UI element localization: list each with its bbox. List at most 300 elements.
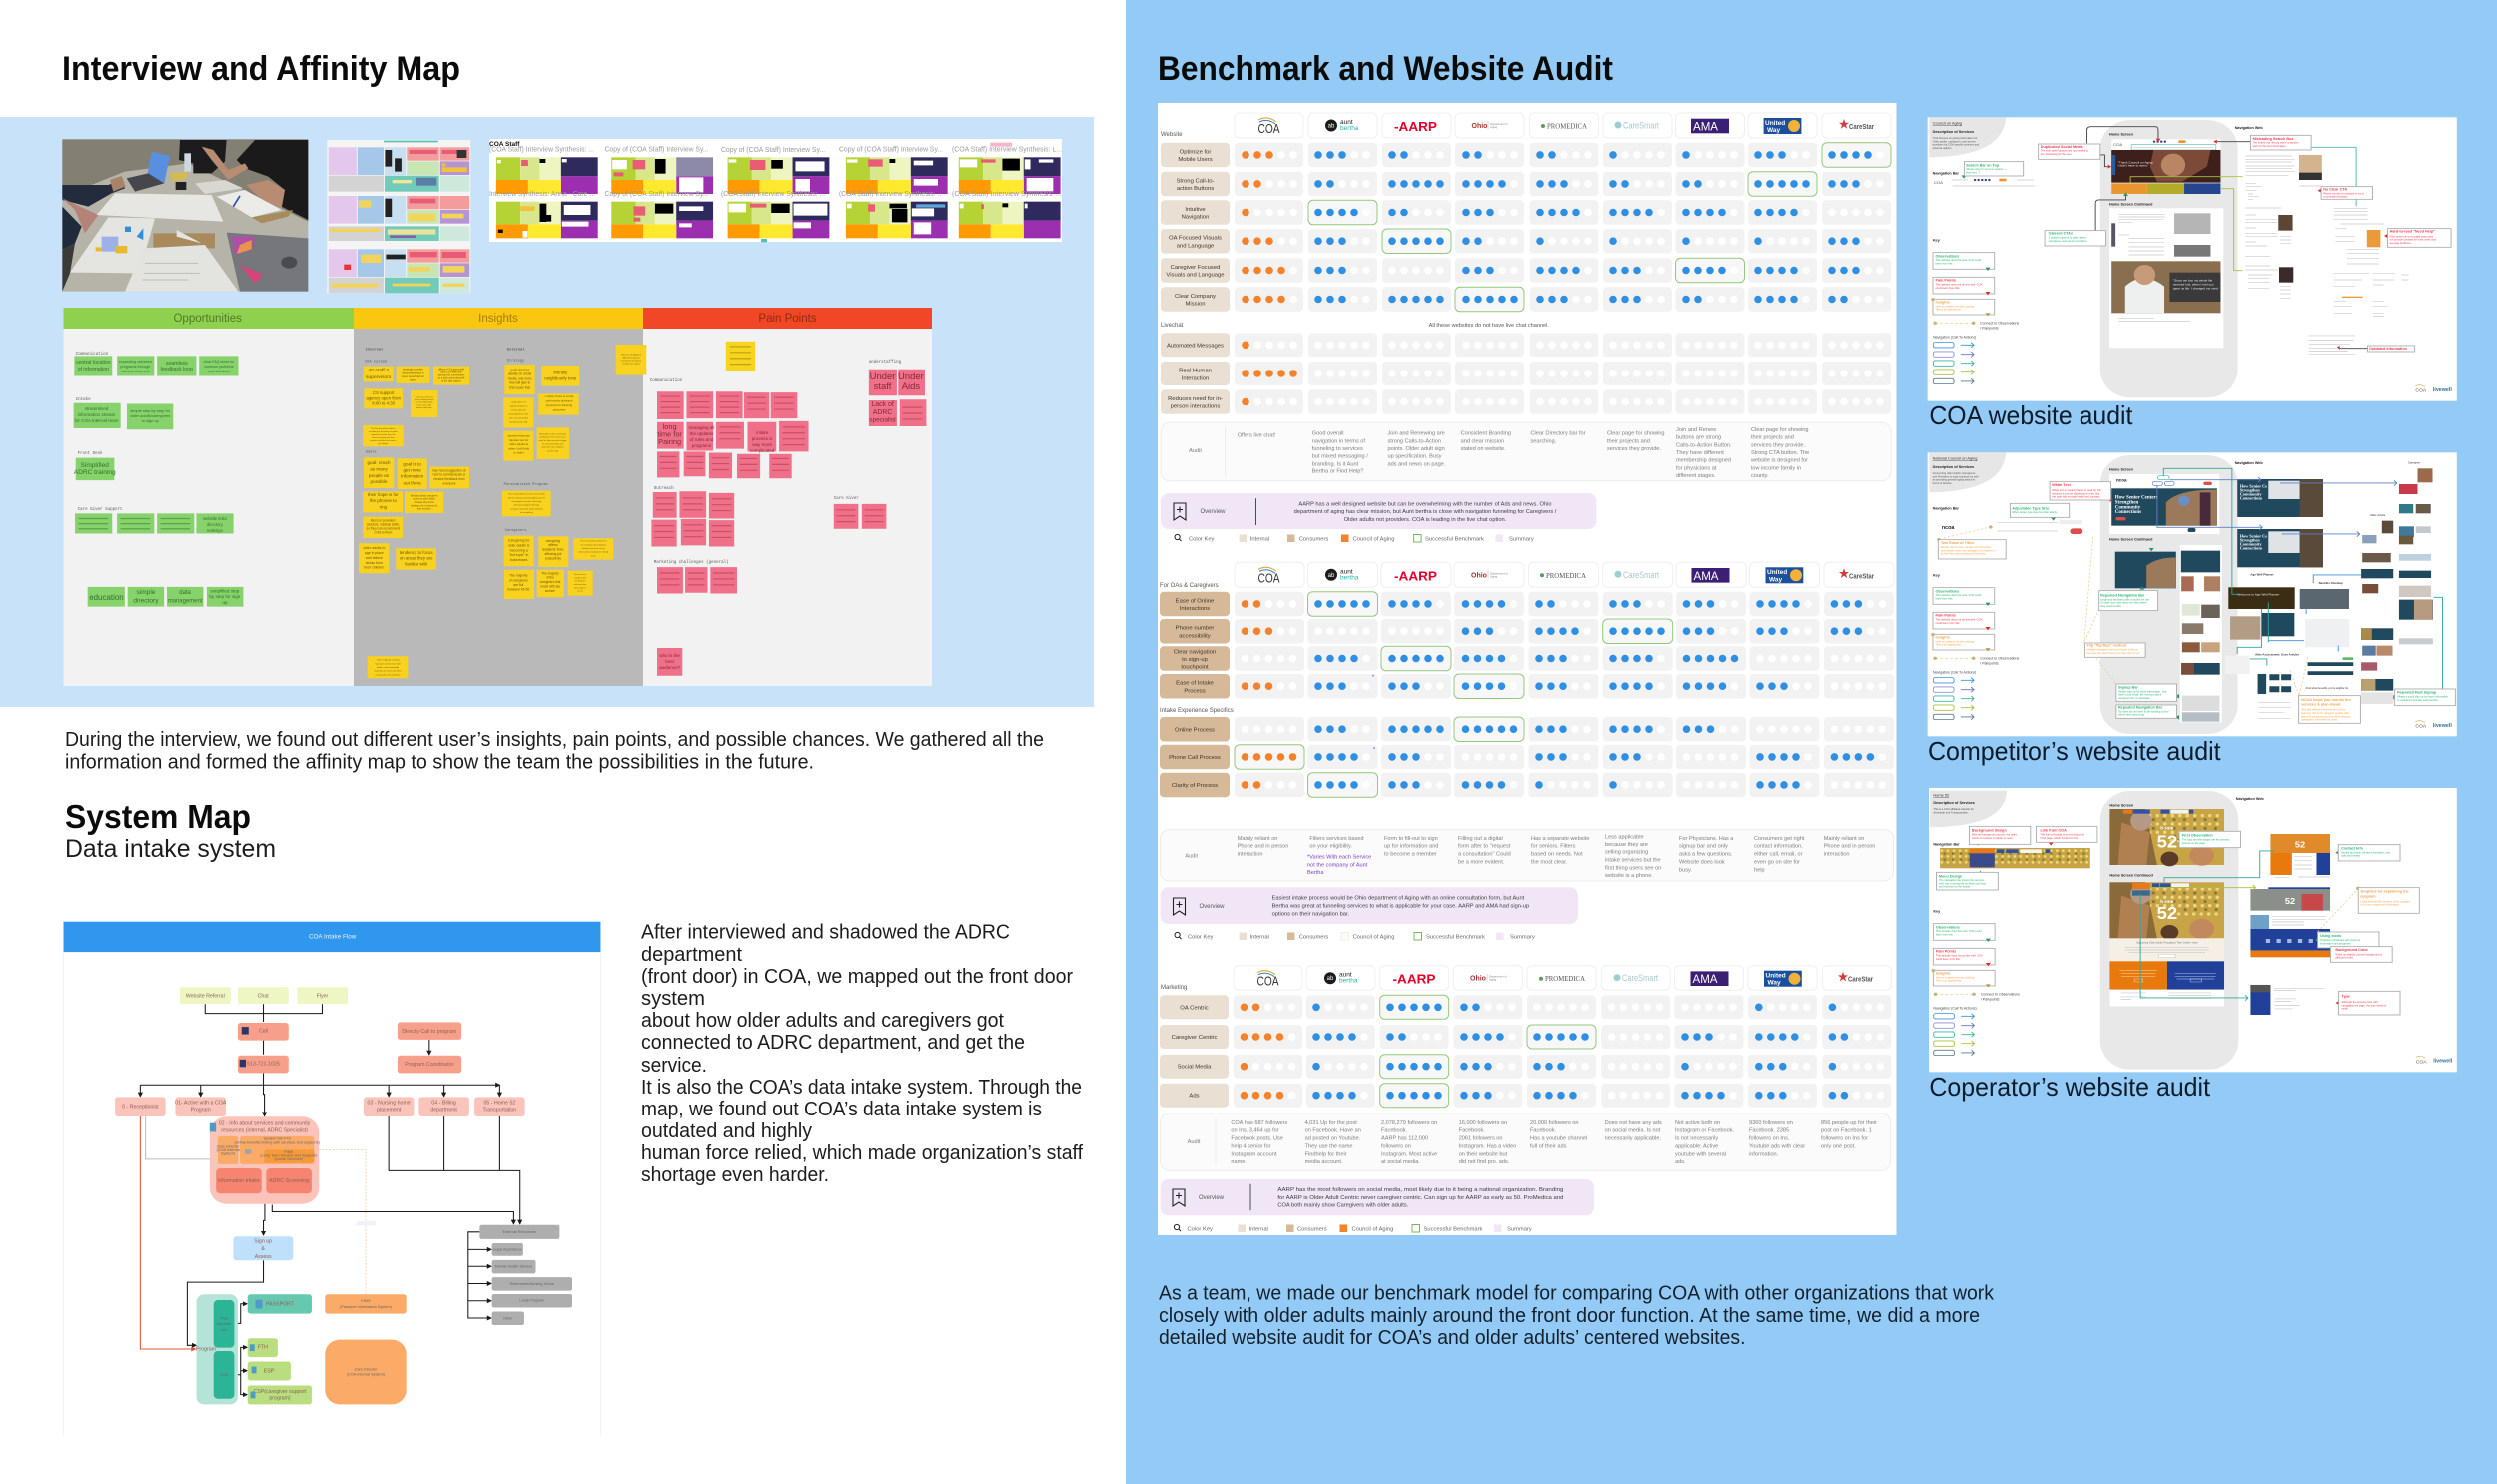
yellow sticky text: agency open from xyxy=(366,395,401,400)
yellow sticky text: advanced consultation in doing xyxy=(578,551,609,554)
yellow sticky text: required, the more and other xyxy=(374,670,402,673)
label: Intake Experience Specifics: Intake Experience Specifics xyxy=(1160,708,1234,714)
programs: COA xyxy=(220,1373,229,1377)
green sticky text: by step for sign xyxy=(209,594,241,599)
information systems: PIMS xyxy=(361,1299,371,1303)
audit notes: intake: signup bar and only xyxy=(1679,844,1728,850)
home screen mock: Strengthen xyxy=(2115,500,2139,505)
logo row 1: Department of xyxy=(1490,122,1508,126)
diagram: cooperator website audit xyxy=(1929,788,2457,1072)
audit notes: intake: the most clear. xyxy=(1531,859,1568,865)
audit notes: marketing: Instagram or Facebook. xyxy=(1675,1128,1735,1134)
home screen mock: "Thank Council on Aging xyxy=(2118,160,2153,164)
green sticky text: older adults/caregivers xyxy=(130,413,170,418)
key legend xyxy=(1931,239,2020,384)
logo row 2: PROMEDICA xyxy=(1546,572,1586,580)
right panel background xyxy=(1126,0,2497,1484)
yellow sticky text: The first step of the intake is xyxy=(371,427,396,430)
thumbnail captions: Copy of (COA Staff) Interview Sy... xyxy=(605,144,709,154)
callouts: With this different assessment tool for xyxy=(2301,708,2346,712)
description card xyxy=(1929,117,2006,157)
key legend: Observations xyxy=(1936,925,1960,929)
key legend: Key xyxy=(1933,239,1940,243)
rating row: Clear Company Mission: Clear Company xyxy=(1175,294,1216,300)
yellow sticky text: more xyxy=(591,554,597,557)
yellow sticky text: supervisors xyxy=(366,374,392,380)
yellow sticky text: how to communicate or xyxy=(433,473,465,477)
audit notes: website xyxy=(1161,422,1891,481)
callouts: Nice feel...? xyxy=(1966,170,1981,174)
rating row: Ease of Online Interactions xyxy=(1164,592,1890,616)
audit notes: website: Clear page for showing xyxy=(1607,430,1665,436)
yellow sticky text: because they know xyxy=(415,501,434,504)
callouts: have to put email, the rest you add a xyxy=(2118,693,2162,697)
rating row: Reduces need for in-person interactions: person interactions xyxy=(1171,404,1220,410)
sticky note category labels: Communication xyxy=(76,352,109,357)
callouts: Link from COA xyxy=(2040,828,2067,832)
pink sticky text: Lack of xyxy=(871,401,894,408)
callouts: program xyxy=(2360,894,2376,898)
audit notes: marketing: Findhelp for their xyxy=(1305,1151,1347,1157)
audit notes: marketing: on Facebook. Have an xyxy=(1305,1128,1361,1134)
ADRC specialist group: System) xyxy=(221,1152,236,1155)
yellow sticky text: provider and then the team to xyxy=(370,439,397,442)
color key: website: Color Key xyxy=(1189,537,1215,543)
rating row: Automated Messages xyxy=(1165,337,1887,353)
callouts: NCOA helps you narrow the xyxy=(2301,698,2351,702)
yellow sticky text: training to be in person for xyxy=(411,504,437,507)
navigation web pages: Strengthen xyxy=(2240,538,2261,543)
description card: Connecting older Adults, Caregivers, xyxy=(1933,471,1976,475)
key legend: learn from this. xyxy=(1935,261,1953,265)
callouts: Two Rows of Titles xyxy=(1941,541,1974,545)
audit notes: intake: busy. xyxy=(1679,867,1692,873)
pink sticky text: time for xyxy=(657,429,682,439)
logo row 3: Ohio xyxy=(1470,976,1486,983)
green sticky text: to sign up xyxy=(142,418,160,423)
yellow sticky text: out there xyxy=(403,480,421,485)
yellow sticky note shapes xyxy=(359,345,646,678)
insights sticky notes xyxy=(359,345,646,678)
audit notes: marketing: applicable. Active xyxy=(1675,1143,1718,1149)
pink sticky text: Under xyxy=(898,371,924,382)
logo row 1: aunt xyxy=(1340,119,1353,126)
yellow sticky text: Most on providers xyxy=(371,518,396,522)
navigation web pages: Benefits Checkup xyxy=(2319,581,2343,585)
yellow sticky text: and relieve xyxy=(366,556,383,560)
audit notes: website: strong Calls-to-Action xyxy=(1388,438,1441,444)
logo row 1: Ohio xyxy=(1472,123,1487,130)
callouts: Simple sign up for more information. Just xyxy=(2118,689,2167,693)
navigation web pages: Navigation Web xyxy=(2235,461,2263,465)
audit notes: website: services they provide. xyxy=(1751,442,1806,448)
logo row 1: CareSmart xyxy=(1623,120,1659,130)
yellow sticky text: age in place xyxy=(365,551,384,555)
column: Pain Points xyxy=(643,308,932,686)
audit notes: website: services they provide. xyxy=(1607,446,1662,452)
yellow sticky text: 8:00 to 4:30 xyxy=(372,401,396,406)
navigation bar sample: Navigation Bar xyxy=(1933,507,1960,511)
logo row 1: PROMEDICA xyxy=(1547,122,1587,130)
yellow sticky text: source, meeting with their xyxy=(372,436,395,439)
key legend: Insights xyxy=(1935,301,1950,305)
audit notes: marketing: help 4 senior for xyxy=(1231,1143,1271,1149)
yellow sticky text: businesses xyxy=(510,558,528,562)
pink sticky text: process is xyxy=(752,436,773,441)
yellow sticky text: "hot topic" in xyxy=(509,553,528,557)
home screen mock xyxy=(2109,467,2219,534)
callouts: a consistent location. xyxy=(2323,194,2348,198)
description card: external options. xyxy=(1933,146,1952,150)
audit arrows xyxy=(2051,468,2443,720)
panel: benchmark table xyxy=(1158,103,1896,1235)
audit notes: website: navigation in terms of xyxy=(1312,438,1365,444)
audit notes: intake: Filters services based xyxy=(1309,836,1363,842)
audit notes: marketing: followers on xyxy=(1381,1143,1411,1149)
department options: 01- Active with a COA xyxy=(175,1101,227,1106)
yellow sticky text: their hope is for xyxy=(368,492,399,497)
text block: interview summary xyxy=(65,729,1044,773)
audit notes: website: branding. Is it Aunt xyxy=(1312,462,1359,468)
audit notes: website: different stages. xyxy=(1676,473,1716,479)
logo row 1: -AARP xyxy=(1394,119,1437,134)
column: Insights xyxy=(354,308,643,686)
color key: marketing: Council of Aging xyxy=(1352,1226,1393,1232)
home screen mock xyxy=(2109,132,2220,194)
callouts: not provide contrast for most users and xyxy=(2390,238,2436,242)
audit notes: marketing: 2,078,279 followers on xyxy=(1381,1120,1437,1126)
audit notes: website: low income family in xyxy=(1751,465,1801,471)
description card: Council on Aging xyxy=(1933,122,1962,126)
audit notes: intake: not the company of Aunt xyxy=(1307,862,1368,868)
home screen mock: How Senior Centers xyxy=(2115,495,2158,500)
text block: system map description xyxy=(641,921,1083,1186)
rating row: Ease of Online Interactions: Ease of Online xyxy=(1176,598,1215,604)
callouts: White on brightly colored background is xyxy=(2335,952,2383,956)
call boxes: Call xyxy=(259,1029,268,1034)
key legend: Observations xyxy=(1935,589,1959,593)
key legend: Pain Points xyxy=(1935,279,1956,283)
green sticky text: clear FAQ sheet for xyxy=(204,360,235,364)
pink sticky text: managing all xyxy=(689,425,714,430)
footer logos xyxy=(2416,1056,2453,1065)
pink sticky text: Aids xyxy=(902,381,920,392)
pink sticky text: best xyxy=(665,659,675,664)
caption: COA website audit: COA website audit xyxy=(1929,402,2132,430)
yellow sticky text: between 45-55 xyxy=(507,588,529,592)
sticky note category labels: Outreach xyxy=(654,486,674,491)
callouts: Although the pictures help with xyxy=(2341,1000,2378,1004)
audit notes: intake: a consultation" Could xyxy=(1458,852,1511,858)
color key: marketing: Internal xyxy=(1248,1226,1268,1232)
callouts: Duplicated Social Media xyxy=(2041,145,2084,149)
callouts: White text is usually harder to read for OA xyxy=(2052,488,2101,492)
callouts: well, has a strong tab as when you float xyxy=(1939,881,1986,885)
description card: and Providers to local solutions as well xyxy=(1933,474,1979,478)
yellow sticky text: are full xyxy=(513,583,524,587)
yellow sticky text: number for calling xyxy=(622,362,640,365)
insights category labels: Internal xyxy=(366,347,384,352)
call boxes: Directly Call to program xyxy=(402,1029,456,1035)
callouts: Graphics for explaining the xyxy=(2360,890,2409,894)
key legend: could learn from this. xyxy=(1936,957,1961,961)
description card: home of articles. xyxy=(1933,481,1952,485)
thumbnail captions: Copy of (COA Staff) Interview Sy... xyxy=(839,144,943,154)
audit notes: intake: be a more evident. xyxy=(1458,859,1505,865)
yellow sticky text: the phones to xyxy=(370,498,397,503)
description card: Older adults, caregivers, and service xyxy=(1933,139,1976,143)
green sticky text: information stream xyxy=(78,412,116,417)
overview: website: department of aging has clear mission, but Aunt bertha is close with navigation funneling for Caregivers / xyxy=(1294,509,1557,515)
logo row 2: ab xyxy=(1328,573,1335,579)
description card xyxy=(1929,452,2006,492)
key legend: This website does this well. COA could xyxy=(1936,929,1982,933)
audit notes: website: and clear mission xyxy=(1461,438,1504,444)
logo row 2: -AARP xyxy=(1394,568,1437,583)
text block: system map description: (front door) in COA, we mapped out the front door xyxy=(641,966,1073,988)
rating row: Strong Call-to-action Buttons xyxy=(1165,172,1887,196)
logo row 3: Aging xyxy=(1489,978,1497,982)
audit notes: intake: For Physicians. Has a xyxy=(1679,836,1734,842)
yellow sticky text: and knows the phone xyxy=(621,359,642,362)
audit notes: website: up specification. Busy xyxy=(1388,454,1442,460)
description card: Assistrate and Transportation. xyxy=(1933,810,1969,814)
yellow sticky text: We have struggled in xyxy=(621,353,642,356)
audit notes: intake: Bertha xyxy=(1307,870,1324,876)
yellow sticky text: so they can recommend xyxy=(366,526,400,530)
home screen mock xyxy=(2109,803,2224,866)
color key: website: Internal xyxy=(1250,537,1269,543)
audit notes: marketing: Youtube ads with clear xyxy=(1749,1143,1805,1149)
callouts: COA page, which is hard to find. xyxy=(2040,836,2079,840)
logo row 2: Department of xyxy=(1490,571,1508,575)
audit notes: website: for physicians at xyxy=(1676,465,1717,471)
chart: COA intake flow xyxy=(64,922,600,1437)
description card xyxy=(1930,791,2007,827)
programs: FTH xyxy=(258,1344,268,1350)
key legend: This website does this well. COA could xyxy=(1935,258,1982,262)
callouts: for a more organized information. xyxy=(2360,903,2400,907)
description card: providers for COA specific services and xyxy=(1933,143,1980,147)
green sticky text: management xyxy=(168,598,203,605)
callouts: Simple way for users to explore — xyxy=(1966,167,2007,171)
logo row 2: bertha xyxy=(1340,574,1359,581)
audit notes: marketing: 4,031 Up for the post xyxy=(1305,1120,1357,1126)
audit notes: marketing: Facebook. 2385 xyxy=(1749,1128,1789,1134)
audit notes: marketing: youtube with several xyxy=(1675,1151,1726,1157)
yellow sticky text: their children xyxy=(364,566,384,570)
yellow sticky text: doesn't always automatically be part of xyxy=(508,496,545,499)
text block: interview summary: During the interview, we found out different user’s insights, pain points, and possible chances. We gathered all the xyxy=(65,729,1044,751)
callouts: Fine white text on a bright color does xyxy=(2390,234,2434,238)
callouts: Simple and clear contact information, text xyxy=(2341,850,2390,854)
home screen continued mock: Supporting Older Adults Throughout Their Golden Years xyxy=(2136,942,2199,945)
rating row: Reduces need for in-person interactions xyxy=(1165,393,1887,410)
programs: CSP(caregiver support xyxy=(253,1389,307,1395)
audit notes: website: funneling to services xyxy=(1312,446,1363,452)
pink sticky text: complicated xyxy=(750,448,775,453)
audit notes: marketing: Audit xyxy=(1188,1139,1201,1145)
key legend: learn from this. xyxy=(1936,932,1954,936)
yellow sticky text: adults - those materials xyxy=(377,666,399,669)
callouts: to make sure user does not miss where xyxy=(2100,601,2147,605)
footer logos: COA xyxy=(2416,1059,2427,1065)
callouts: this type has enough height and contrast. xyxy=(2052,495,2100,499)
board row 2 xyxy=(329,196,469,241)
yellow sticky text: purposes xyxy=(553,408,566,412)
audit notes: intake: even go on site for xyxy=(1754,859,1800,865)
color key: website: Consumers xyxy=(1299,537,1328,543)
home screen mock: home xyxy=(2160,826,2174,832)
yellow sticky text: Caregiving for xyxy=(508,539,530,543)
overview: website: AARP has a well designed website but can be overwhelming with the number of Ads and news. Ohio xyxy=(1298,501,1552,507)
sign up and assess: Sign up xyxy=(254,1238,272,1244)
key legend: This is an opportunity. xyxy=(1935,643,1962,647)
audit notes: marketing: on Ins. 3,464 up for xyxy=(1231,1128,1279,1134)
referral sources: Chat xyxy=(258,993,269,999)
yellow sticky text: goal: reach xyxy=(367,460,391,465)
audit notes: website: their projects and xyxy=(1607,438,1650,444)
caption: competitor website audit: Competitor’s website audit xyxy=(1928,738,2221,766)
ADRC specialist group: resources (internal, ADRC Specialist) xyxy=(221,1128,308,1133)
yellow sticky text: community outreach xyxy=(546,398,573,402)
diagram: competitor website audit xyxy=(1928,452,2457,736)
audit notes: website: Calls-to-Action Button. xyxy=(1676,442,1732,448)
navigation bar sample: ncoa xyxy=(1942,525,1955,531)
navigation web pages xyxy=(2236,797,2330,1015)
callouts: 3 buttons catered to older adults, xyxy=(2049,236,2087,240)
yellow sticky text: have COA work and xyxy=(441,371,462,374)
yellow sticky text: strategic provide xyxy=(403,368,423,371)
label: Marketing: Marketing xyxy=(1161,985,1187,991)
yellow sticky text: coming after the pandemic xyxy=(375,673,402,676)
green sticky text: simplified step xyxy=(210,588,240,594)
home screen continued mock: Home Screen Continued xyxy=(2109,537,2152,541)
green sticky text: and solutions xyxy=(208,370,230,373)
rating row: Online Process: Online Process xyxy=(1175,727,1215,733)
yellow sticky text: team xyxy=(410,378,416,382)
audit notes: website: Clear page for showing xyxy=(1751,427,1809,433)
yellow sticky text: The majority xyxy=(509,574,528,578)
text block: system map description: human force relied, which made organization’s staff xyxy=(641,1142,1083,1164)
green sticky text: simple xyxy=(136,589,156,596)
rating row: Ease of Intake Process xyxy=(1164,674,1890,699)
key legend: could learn from this. xyxy=(1935,621,1961,625)
yellow sticky text: on areas they are xyxy=(400,555,433,560)
photo: team working around a table xyxy=(62,139,308,292)
yellow sticky text: older adults is xyxy=(508,544,530,548)
audit notes: marketing: 16,000 followers on xyxy=(1459,1120,1507,1126)
callouts: average Audience. xyxy=(2390,241,2412,245)
rating row: Caregiver Focused Visuals and Language: Visuals and Language xyxy=(1166,273,1225,279)
callouts: and heavier when the navigation is lengthier in xyxy=(1941,548,1996,552)
yellow sticky text: There are more xyxy=(574,574,586,576)
yellow sticky text: spread response xyxy=(508,434,530,438)
key legend: Connect to Observations xyxy=(1981,993,2020,997)
pink sticky text: Under xyxy=(870,371,895,382)
overview: marketing: Overview xyxy=(1199,1195,1225,1201)
flow connectors xyxy=(140,1004,520,1395)
color key: intake: Successful Benchmark xyxy=(1426,935,1485,941)
yellow sticky text: when you program through xyxy=(513,504,540,507)
logo row 3: COA xyxy=(1256,974,1279,989)
sticky note category labels: Care Giver Support xyxy=(78,507,123,512)
navigation web pages: Navigation Web xyxy=(2236,797,2265,801)
navigation web pages: Community xyxy=(2240,492,2262,497)
rating row: OA Focused Visuals and Language: OA Focused Visuals xyxy=(1169,236,1222,242)
yellow sticky text: goal is to xyxy=(403,462,421,467)
yellow sticky text: of the xyxy=(546,575,554,579)
audit notes: website: website is designed for xyxy=(1750,458,1808,464)
label: Livechat: Livechat xyxy=(1161,323,1184,329)
home screen continued mock xyxy=(2109,537,2222,722)
ADRC specialist group: System DB FTS xyxy=(263,1137,291,1141)
navigation web pages xyxy=(2235,126,2409,354)
rating row: Caregiver Centric xyxy=(1164,1025,1887,1049)
audit notes: marketing: information. xyxy=(1749,1151,1779,1157)
yellow sticky text: to the right support xyxy=(441,380,461,383)
color key: intake: Consumers xyxy=(1299,935,1328,941)
home screen mock: Community xyxy=(2115,505,2141,510)
callouts: The logo and the slogan are the primary xyxy=(2182,838,2230,842)
text block: system map description: After interviewed and shadowed the ADRC xyxy=(641,921,1010,943)
yellow sticky text: for their help xyxy=(547,450,559,453)
thumbnail captions: Interview Synthesis: Anna - Care ... xyxy=(489,189,595,198)
rating row: Strong Call-to-action Buttons: action Buttons xyxy=(1177,186,1214,192)
yellow sticky text: handed out for xyxy=(509,438,528,442)
audit notes: marketing: followers on Ins. xyxy=(1749,1136,1790,1142)
callouts: Allows a quick sign up for more information xyxy=(2397,695,2449,699)
green sticky text: seamless xyxy=(166,361,188,367)
audit notes: intake: Phone and in person xyxy=(1824,844,1875,850)
rating row: OA Centric: OA Centric xyxy=(1180,1005,1209,1011)
callouts: The link to Assistly is on the bottom of xyxy=(2040,833,2084,837)
ADRC specialist group: 02 - Info about services and community xyxy=(219,1121,311,1127)
yellow sticky text: certain agencies xyxy=(510,408,526,411)
color key: intake xyxy=(1175,932,1535,941)
callouts: Background Color xyxy=(2335,948,2369,952)
audit notes: intake: up for information and xyxy=(1384,844,1438,850)
audit notes: marketing: ad posted on Youtube. xyxy=(1305,1136,1361,1142)
yellow sticky text: becoming a xyxy=(510,549,528,553)
overview: intake: Easiest intake process would be Ohio department of Aging with an online consultation form, but Aunt xyxy=(1272,896,1525,902)
key legend: Connect to Observations xyxy=(1980,657,2020,661)
thumbnail captions: (COA Staff) Interview Synthesis: ... xyxy=(721,189,825,198)
overview: marketing xyxy=(1161,1179,1594,1215)
audit notes: intake: first thing users see on xyxy=(1605,865,1661,871)
color key: marketing: Summary xyxy=(1507,1226,1532,1232)
logo row 3: Department of xyxy=(1489,975,1507,979)
rating row: Clear Company Mission xyxy=(1165,287,1887,312)
key legend: Insights xyxy=(1935,636,1950,640)
diagram: COA website audit xyxy=(1928,117,2457,401)
flow header xyxy=(64,922,600,952)
callouts: where they want to go. xyxy=(2118,713,2145,717)
navigation web pages: How Senior Ce xyxy=(2240,533,2267,538)
callouts: Search Bar on Top xyxy=(1966,163,2000,167)
external resources: Local Program xyxy=(519,1299,544,1303)
logo row 2: aunt xyxy=(1340,568,1353,575)
yellow sticky text: stress from xyxy=(366,561,383,565)
yellow sticky text: needs a long time xyxy=(416,406,432,409)
audit notes: marketing: 2061 followers on xyxy=(1459,1136,1503,1142)
navigation web pages: Connections xyxy=(2240,496,2263,501)
thumbnail captions xyxy=(489,141,1062,198)
green sticky text: website links xyxy=(203,516,227,521)
programs: ESP xyxy=(264,1368,275,1374)
audit notes: intake: Consumers get right xyxy=(1754,836,1805,842)
label: For OAs & Caregivers: For OAs & Caregivers xyxy=(1160,583,1219,589)
